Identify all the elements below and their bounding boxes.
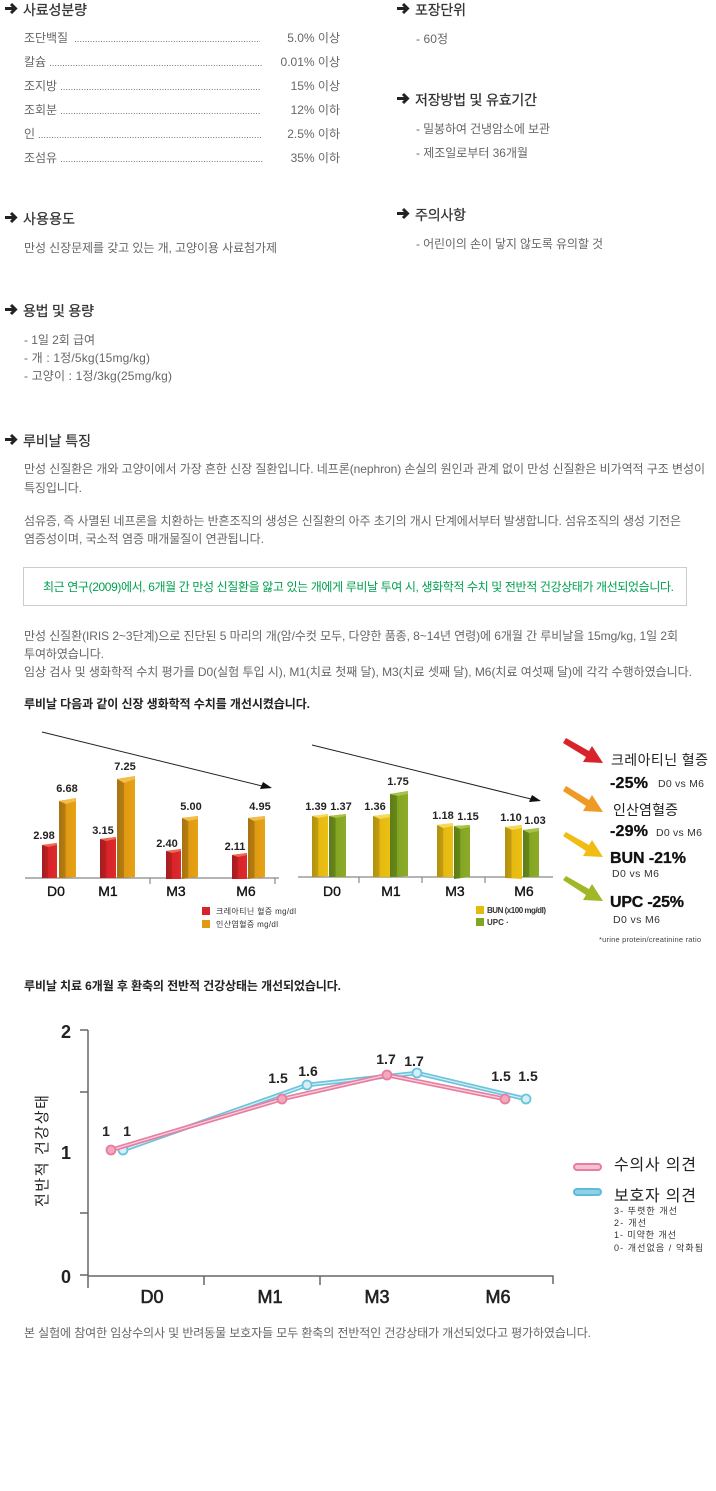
axis labels: M6 bbox=[236, 883, 256, 899]
heading: cautions: 주의사항 bbox=[415, 207, 466, 223]
scale notes: 1- 미약한 개선 bbox=[614, 1229, 676, 1240]
bars D0 bbox=[312, 814, 346, 877]
icon: arrow bbox=[5, 213, 16, 222]
text: packaging: - 60정 bbox=[416, 32, 448, 46]
legend: 인산염혈증 mg/dl bbox=[216, 919, 278, 929]
heading: usage: 사용용도 bbox=[23, 211, 75, 227]
panel: cautions bbox=[397, 207, 603, 251]
line chart: overall health bbox=[34, 1022, 553, 1307]
icon: arrow bbox=[5, 4, 16, 13]
row: crude fat bbox=[24, 79, 340, 93]
y axis numbers bbox=[61, 1022, 71, 1287]
value labels: 1.5 bbox=[268, 1070, 288, 1086]
panel: improvement summary bbox=[563, 738, 708, 944]
heading: storage: 저장방법 및 유효기간 bbox=[415, 92, 537, 108]
UPC result: UPC -25% bbox=[610, 894, 684, 911]
callout: recent study: 최근 연구(2009)에서, 6개월 간 만성 신질환을 앓고 있는 개에게 루비날 투여 시, 생화학적 수치 및 전반적 건강상태가 개선되었습니다. bbox=[43, 580, 674, 594]
icon: arrow bbox=[5, 305, 16, 314]
panel: feed composition bbox=[5, 2, 340, 165]
x axis labels: M1 bbox=[257, 1287, 283, 1307]
row: crude fiber: 조섬유 bbox=[24, 151, 57, 165]
value labels: 1.5 bbox=[491, 1068, 511, 1084]
x axis labels: M6 bbox=[485, 1287, 511, 1307]
y axis numbers: 0 bbox=[61, 1267, 71, 1287]
scale notes: 3- 뚜렷한 개선 bbox=[614, 1205, 677, 1216]
text: dosage lines bbox=[24, 333, 172, 383]
axis labels: M6 bbox=[514, 883, 534, 899]
footnote: *urine protein/creatinine ratio bbox=[599, 935, 701, 944]
legend: UPC · bbox=[487, 918, 509, 927]
row: crude ash: 조회분 bbox=[24, 103, 57, 117]
value labels: 1.03 bbox=[524, 815, 546, 827]
row: calcium: 칼슘 bbox=[24, 55, 46, 69]
axis labels: M3 bbox=[445, 883, 465, 899]
y axis numbers: 2 bbox=[61, 1022, 71, 1042]
text: paragraph 3: 임상 검사 및 생화학적 수치 평가를 D0(실험 투입 시), M1(치료 첫째 달), M3(치료 셋째 달), M6(치료 여섯째 달)에 각각 수행하였습니다. bbox=[24, 664, 692, 679]
value labels: 2.40 bbox=[156, 838, 178, 850]
text: paragraph 3: 만성 신질환(IRIS 2~3단계)으로 진단된 5 마리의 개(암/수컷 모두, 다양한 품종, 8~14년 연령)에 6개월 간 루비날을 15mg/kg, 1일 2회 bbox=[24, 629, 678, 643]
axes bbox=[80, 1030, 553, 1288]
value labels bbox=[102, 1051, 538, 1139]
text: paragraph 3 bbox=[24, 629, 692, 679]
legend bbox=[476, 906, 546, 927]
axis bbox=[298, 877, 553, 883]
value labels: 7.25 bbox=[114, 761, 136, 773]
creatinine result bbox=[610, 752, 708, 792]
phosphate result: 인산염혈증 bbox=[613, 802, 678, 818]
axis labels: M1 bbox=[98, 883, 118, 899]
panel: storage bbox=[397, 92, 550, 160]
row: crude ash: 12% 이하 bbox=[291, 103, 340, 117]
heading: features: 루비날 특징 bbox=[23, 433, 91, 449]
row: calcium: 0.01% 이상 bbox=[281, 55, 340, 69]
row: crude fiber bbox=[24, 151, 340, 165]
bars M6 bbox=[505, 825, 539, 879]
value labels: 1.10 bbox=[500, 812, 522, 824]
axis labels: D0 bbox=[323, 883, 341, 899]
axis labels bbox=[47, 883, 256, 899]
series: guardian opinion bbox=[118, 1068, 530, 1154]
row: crude fat: 조지방 bbox=[24, 79, 57, 93]
value labels: 1.15 bbox=[457, 811, 479, 823]
bars D0 bbox=[42, 798, 76, 878]
row: phosphorus bbox=[24, 127, 340, 141]
vet legend: 수의사 의견 bbox=[614, 1156, 696, 1174]
callout: recent study bbox=[24, 568, 686, 606]
heading: dosage: 용법 및 용량 bbox=[23, 303, 94, 319]
BUN result: D0 vs M6 bbox=[612, 868, 659, 880]
row: crude fat: 15% 이상 bbox=[291, 79, 340, 93]
phosphate result bbox=[610, 802, 702, 840]
legend bbox=[202, 906, 296, 929]
heading: biochemical improvement: 루비날 다음과 같이 신장 생화학적 수치를 개선시켰습니다. bbox=[24, 696, 310, 711]
text: storage lines bbox=[416, 122, 550, 160]
x axis labels bbox=[140, 1287, 511, 1307]
value labels: 1 bbox=[123, 1123, 131, 1139]
bar chart: creatinine and phosphate bbox=[25, 732, 296, 929]
BUN result: BUN -21% bbox=[610, 850, 686, 867]
text: conclusion: 본 실험에 참여한 임상수의사 및 반려동물 보호자들 모두 환축의 전반적인 건강상태가 개선되었다고 평가하였습니다. bbox=[24, 1326, 591, 1340]
icon: red arrow bbox=[563, 738, 603, 763]
value labels bbox=[305, 776, 546, 827]
text: paragraph 1: 특징입니다. bbox=[24, 481, 82, 495]
axis labels: M1 bbox=[381, 883, 401, 899]
icon: yellow arrow bbox=[563, 832, 603, 857]
series: vet opinion bbox=[106, 1070, 510, 1154]
icon: arrow bbox=[5, 435, 16, 444]
icon: arrow bbox=[397, 4, 408, 13]
panel: features bbox=[5, 433, 705, 711]
panel: usage bbox=[5, 211, 277, 255]
value labels: 6.68 bbox=[56, 783, 78, 795]
value labels: 1.39 bbox=[305, 801, 327, 813]
scale notes: 2- 개선 bbox=[614, 1218, 646, 1228]
BUN result bbox=[610, 850, 686, 880]
heading: packaging: 포장단위 bbox=[415, 2, 466, 18]
x axis labels: M3 bbox=[364, 1287, 390, 1307]
text: dosage lines: - 개 : 1정/5kg(15mg/kg) bbox=[24, 351, 150, 365]
bar chart: BUN and UPC bbox=[298, 745, 553, 927]
value labels: 1.6 bbox=[298, 1063, 318, 1079]
axis labels: M3 bbox=[166, 883, 186, 899]
value labels: 1.7 bbox=[376, 1051, 396, 1067]
value labels: 1.18 bbox=[432, 810, 454, 822]
scale notes: 0- 개선없음 / 악화됨 bbox=[614, 1242, 703, 1253]
icon: arrow bbox=[397, 94, 408, 103]
row: phosphorus: 2.5% 이하 bbox=[287, 127, 340, 141]
axis labels bbox=[323, 883, 534, 899]
bars M6 bbox=[232, 816, 265, 879]
bars M1 bbox=[373, 791, 408, 877]
y axis title: 전반적 건강상태 bbox=[34, 1095, 51, 1207]
value labels: 2.11 bbox=[225, 841, 245, 853]
icon: orange arrow bbox=[563, 786, 603, 812]
text: dosage lines: - 1일 2회 급여 bbox=[24, 333, 95, 347]
value labels: 1.36 bbox=[364, 801, 386, 813]
creatinine result: -25% bbox=[610, 775, 648, 792]
heading: overall health: 루비날 치료 6개월 후 환축의 전반적 건강상태는 개선되었습니다. bbox=[24, 978, 341, 993]
trend arrow bbox=[312, 745, 541, 802]
bars M3 bbox=[166, 816, 198, 879]
text: paragraph 1: 만성 신질환은 개와 고양이에서 가장 흔한 신장 질환입니다. 네프론(nephron) 손실의 원인과 관계 없이 만성 신질환은 비가역적 구조 변성이 bbox=[24, 462, 705, 476]
legend: 크레아티닌 혈증 mg/dl bbox=[216, 906, 296, 916]
text: paragraph 2: 섬유증, 즉 사멸된 네프론을 치환하는 반흔조직의 생성은 신질환의 아주 초기의 개시 단계에서부터 발생합니다. 섬유조직의 생성 기전은 bbox=[24, 514, 681, 528]
text: paragraph 1 bbox=[24, 462, 705, 495]
value labels bbox=[33, 761, 271, 853]
row: crude protein: 5.0% 이상 bbox=[287, 31, 340, 45]
text: paragraph 3: 투여하였습니다. bbox=[24, 647, 104, 661]
trend arrow bbox=[42, 732, 272, 789]
text: cautions: - 어린이의 손이 닿지 않도록 유의할 것 bbox=[416, 237, 603, 251]
value labels: 3.15 bbox=[92, 825, 114, 837]
guardian legend: 보호자 의견 bbox=[614, 1187, 696, 1205]
text: paragraph 2 bbox=[24, 514, 681, 546]
text: paragraph 2: 염증성이며, 국소적 염증 매개물질이 연관됩니다. bbox=[24, 532, 264, 546]
panel: dosage bbox=[5, 303, 172, 383]
row: crude protein bbox=[24, 31, 340, 45]
legend: opinions bbox=[574, 1156, 703, 1253]
legend: BUN (x100 mg/dl) bbox=[487, 906, 546, 915]
UPC result bbox=[610, 894, 684, 926]
value labels: 2.98 bbox=[33, 830, 55, 842]
creatinine result: D0 vs M6 bbox=[658, 778, 704, 790]
value labels: 1 bbox=[102, 1123, 110, 1139]
row: calcium bbox=[24, 55, 340, 69]
text: usage: 만성 신장문제를 갖고 있는 개, 고양이용 사료첨가제 bbox=[24, 241, 277, 255]
scale notes bbox=[614, 1205, 703, 1253]
row: crude protein: 조단백질 bbox=[24, 31, 68, 45]
row: crude ash bbox=[24, 103, 340, 117]
bars M1 bbox=[100, 776, 135, 878]
phosphate result: D0 vs M6 bbox=[656, 827, 702, 839]
heading: feed composition: 사료성분량 bbox=[23, 2, 87, 18]
axis labels: D0 bbox=[47, 883, 65, 899]
value labels: 4.95 bbox=[249, 801, 271, 813]
axis bbox=[25, 878, 279, 884]
panel: packaging bbox=[397, 2, 466, 46]
text: storage lines: - 제조일로부터 36개월 bbox=[416, 146, 528, 160]
text: dosage lines: - 고양이 : 1정/3kg(25mg/kg) bbox=[24, 369, 172, 383]
value labels: 1.5 bbox=[518, 1068, 538, 1084]
value labels: 1.37 bbox=[330, 801, 352, 813]
y axis numbers: 1 bbox=[61, 1143, 71, 1163]
creatinine result: 크레아티닌 혈증 bbox=[611, 752, 708, 768]
row: crude fiber: 35% 이하 bbox=[291, 151, 340, 165]
UPC result: D0 vs M6 bbox=[613, 914, 660, 926]
icon: green arrow bbox=[563, 876, 603, 901]
value labels: 5.00 bbox=[180, 801, 202, 813]
value labels: 1.75 bbox=[387, 776, 409, 788]
phosphate result: -29% bbox=[610, 823, 648, 840]
value labels: 1.7 bbox=[404, 1053, 424, 1069]
bars M3 bbox=[437, 823, 470, 879]
text: storage lines: - 밀봉하여 건냉암소에 보관 bbox=[416, 122, 550, 136]
icon: arrow bbox=[397, 209, 408, 218]
row: phosphorus: 인 bbox=[24, 127, 35, 141]
x axis labels: D0 bbox=[140, 1287, 164, 1307]
